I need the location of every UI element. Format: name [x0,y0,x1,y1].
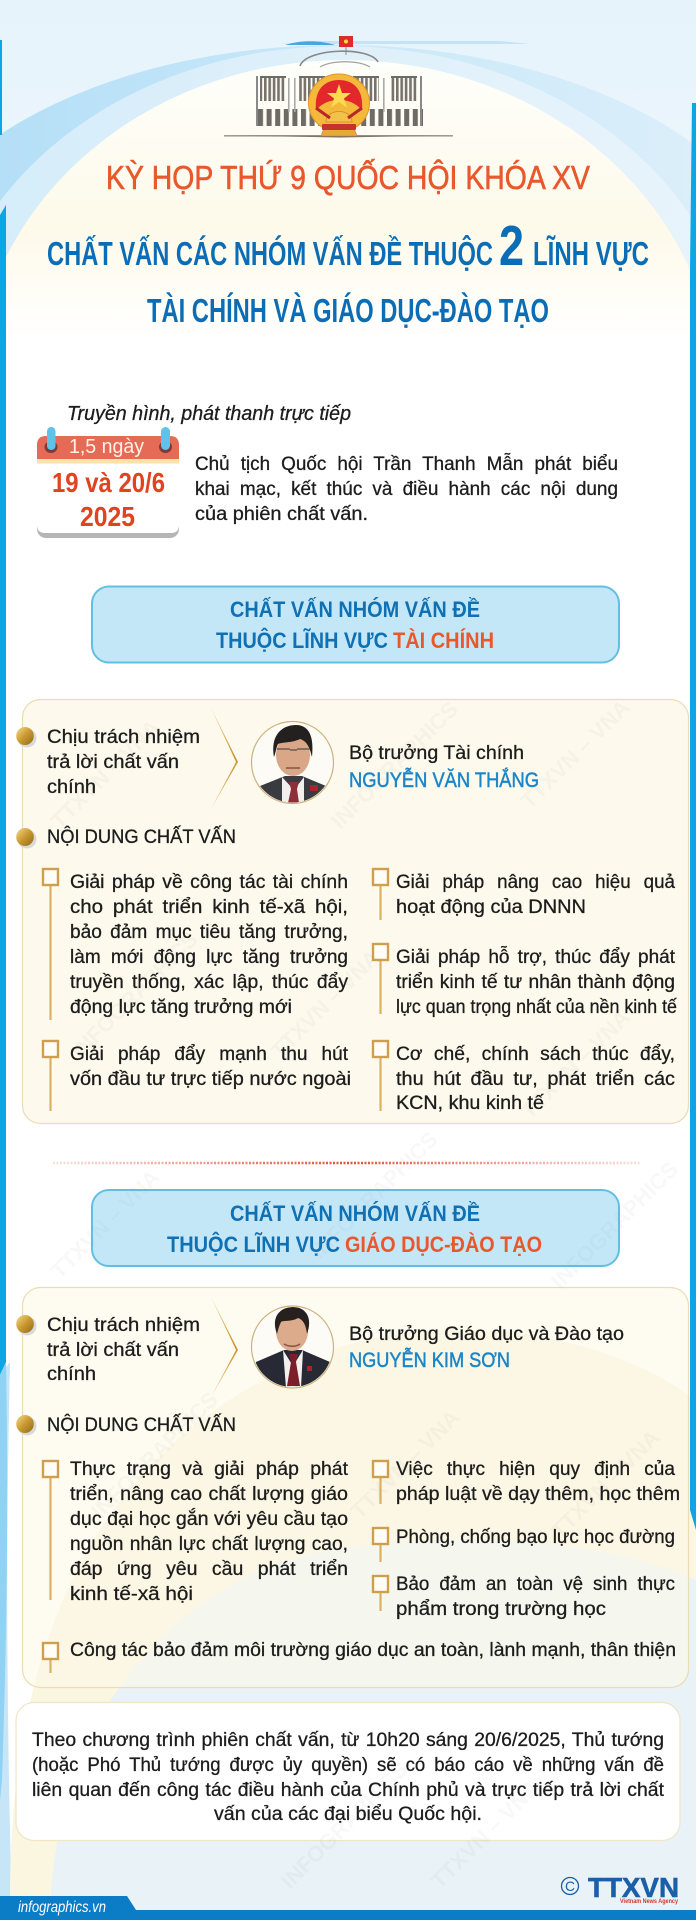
callout: prime minister report: vấn của các đại biểu Quốc hội. [214,1803,482,1825]
portrait: education minister [252,1306,334,1388]
watermark: TTXVN – VNA [546,1425,665,1544]
item: food safety [373,1573,675,1620]
icon: National Assembly building with emblem [224,36,453,138]
title: main heading: 2 [499,214,524,278]
text: education minister [349,1323,624,1372]
item: FDI [43,1041,351,1111]
text: responsibility: trả lời chất vấn [47,751,179,773]
watermark: TTXVN – VNA [346,1405,465,1524]
item: industrial zones: thu hút đầu tư, phát triển các [396,1068,675,1090]
item: safe environment [43,1639,676,1673]
item: SOE: hoạt động của DNNN [396,896,586,918]
item: extra classes: pháp luật về dạy thêm, học thêm [396,1483,680,1505]
watermark: INFOGRAPHICS [306,1127,443,1264]
item: extra classes: Việc thực hiện quy định của [396,1458,675,1480]
text: responsibility: chính [47,776,96,798]
text: education minister: Bộ trưởng Giáo dục và Đào tạo [349,1323,624,1345]
item: higher education: đáp ứng yêu cầu phát triển [70,1558,348,1580]
banner: finance: CHẤT VẤN NHÓM VẤN ĐỀ [230,597,480,622]
item: finance policy: làm mới động lực tăng trưởng [70,946,348,968]
title: session: KỲ HỌP THỨ 9 QUỐC HỘI KHÓA XV [106,158,590,196]
callout: prime minister report: liên quan đến công tác điều hành của Chính phủ và trực tiếp trả lời chất [32,1779,665,1801]
callout: prime minister report [16,1702,680,1840]
item: extra classes [373,1458,680,1505]
text: chairman role: khai mạc, kết thúc và điều hành các nội dung [195,478,618,500]
panel: finance [16,700,688,1124]
item: private economy [373,944,677,1018]
text: finance minister [349,742,539,792]
text: live broadcast: Truyền hình, phát thanh trực tiếp [67,402,351,425]
item: SOE [373,869,675,920]
watermark: TTXVN – VNA [46,1165,165,1284]
item: higher education [43,1458,349,1605]
item: FDI: vốn đầu tư trực tiếp nước ngoài [70,1068,351,1090]
text: site: infographics.vn [18,1899,106,1916]
title: main heading: CHẤT VẤN CÁC NHÓM VẤN ĐỀ THUỘC [47,234,493,272]
text: responsibility [47,1314,200,1385]
bullet: content [16,1415,36,1436]
panel: education [16,1288,688,1688]
icon: calendar: 1,5 ngày [69,435,145,458]
item: industrial zones: Cơ chế, chính sách thúc đẩy, [396,1043,675,1065]
logo: TTXVN: C [565,1878,575,1894]
banner: finance: THUỘC LĨNH VỰC [216,628,388,653]
title: main heading [47,214,649,329]
text: chairman role: Chủ tịch Quốc hội Trần Thanh Mẫn phát biểu [195,452,618,475]
item: safe environment: Công tác bảo đảm môi trường giáo dục an toàn, lành mạnh, thân thiện [70,1639,676,1661]
banner: finance [92,586,619,662]
bullet: responsibility [16,1315,36,1336]
banner: education: THUỘC LĨNH VỰC [167,1232,340,1257]
item: finance policy [43,869,348,1020]
item: school violence [373,1526,675,1562]
item: SOE: Giải pháp nâng cao hiệu quả [396,871,675,893]
item: food safety: phẩm trong trường học [396,1598,606,1620]
item: private economy: Giải pháp hỗ trợ, thúc đẩy phát [396,945,676,968]
item: finance policy: động lực tăng trưởng mới [70,996,292,1018]
item: FDI: Giải pháp đẩy mạnh thu hút [70,1043,349,1065]
icon: calendar [37,427,179,538]
heading: content: NỘI DUNG CHẤT VẤN [47,1413,236,1436]
watermark: TTXVN – VNA [426,1775,545,1894]
item: higher education: kinh tế-xã hội [70,1583,193,1605]
icon: calendar: 2025 [80,501,135,532]
logo: TTXVN: TTXVN [588,1872,679,1903]
item: higher education: triển, nâng cao chất lượng giáo [70,1483,348,1505]
arrow: chevron [211,1297,238,1397]
banner: finance: TÀI CHÍNH [393,628,494,653]
item: finance policy: cho phát triển kinh tế-xã hội, [70,896,348,918]
watermark: INFOGRAPHICS [86,1387,223,1524]
text: finance minister: NGUYỄN VĂN THẮNG [349,768,539,792]
watermark: TTXVN – VNA [46,715,165,834]
icon: national emblem [308,74,370,136]
banner: education: GIÁO DỤC-ĐÀO TẠO [345,1232,542,1257]
title: main heading: LĨNH VỰC [533,235,649,272]
watermark: TTXVN – VNA [516,1005,635,1124]
watermark: INFOGRAPHICS [276,1757,413,1894]
item: industrial zones [373,1041,675,1114]
text: responsibility: chính [47,1363,96,1385]
text: chairman role: của phiên chất vấn. [195,503,368,525]
arrow: chevron [211,708,238,809]
bullet: responsibility [16,727,36,748]
item: finance policy: Giải pháp về công tác tài chính [70,871,348,893]
heading: content: NỘI DUNG CHẤT VẤN [47,825,236,848]
watermark: INFOGRAPHICS [66,927,203,1064]
icon: calendar: 19 và 20/6 [52,467,165,498]
watermark: TTXVN – VNA [516,695,635,814]
text: responsibility [47,726,200,798]
watermark [46,695,683,1894]
item: private economy: lực quan trọng nhất của nền kinh tế [396,996,677,1018]
icon: flag [339,36,353,55]
banner: education [92,1190,619,1266]
item: industrial zones: KCN, khu kinh tế [396,1092,544,1114]
item: school violence: Phòng, chống bạo lực học đường [396,1526,675,1548]
item: higher education: dục đại học gắn với yêu cầu tạo [70,1507,348,1530]
text: finance minister: Bộ trưởng Tài chính [349,742,524,764]
text: responsibility: Chịu trách nhiệm [47,726,200,748]
item: higher education: nguồn nhân lực chất lượng cao, [70,1533,348,1555]
text: responsibility: Chịu trách nhiệm [47,1314,200,1336]
watermark: INFOGRAPHICS [546,1157,683,1294]
callout: prime minister report: (hoặc Phó Thủ tướng được ủy quyền) sẽ có báo cáo về những vấn đề [32,1754,664,1776]
item: finance policy: truyền thống, xác lập, thúc đẩy [70,971,348,993]
text: education minister: NGUYỄN KIM SƠN [349,1349,510,1372]
banner: education: CHẤT VẤN NHÓM VẤN ĐỀ [230,1201,480,1226]
text: responsibility: trả lời chất vấn [47,1339,179,1361]
footer bar [0,1896,696,1920]
bullet: content [16,828,36,848]
title: main heading: TÀI CHÍNH VÀ GIÁO DỤC-ĐÀO TẠO [147,292,549,329]
text: chairman role [195,452,618,525]
item: food safety: Bảo đảm an toàn vệ sinh thực [396,1573,675,1595]
callout: prime minister report: Theo chương trình phiên chất vấn, từ 10h20 sáng 20/6/2025, Thủ tướng [32,1729,664,1751]
watermark: INFOGRAPHICS [326,697,463,834]
item: finance policy: bảo đảm mục tiêu tăng trưởng, [70,921,348,943]
watermark: TTXVN – VNA [266,945,385,1064]
item: higher education: Thực trạng và giải pháp phát [70,1458,349,1480]
item: private economy: triển kinh tế tư nhân thành động [396,971,675,993]
portrait: finance minister [252,722,334,804]
logo: TTXVN: Vietnam News Agency [620,1898,678,1905]
